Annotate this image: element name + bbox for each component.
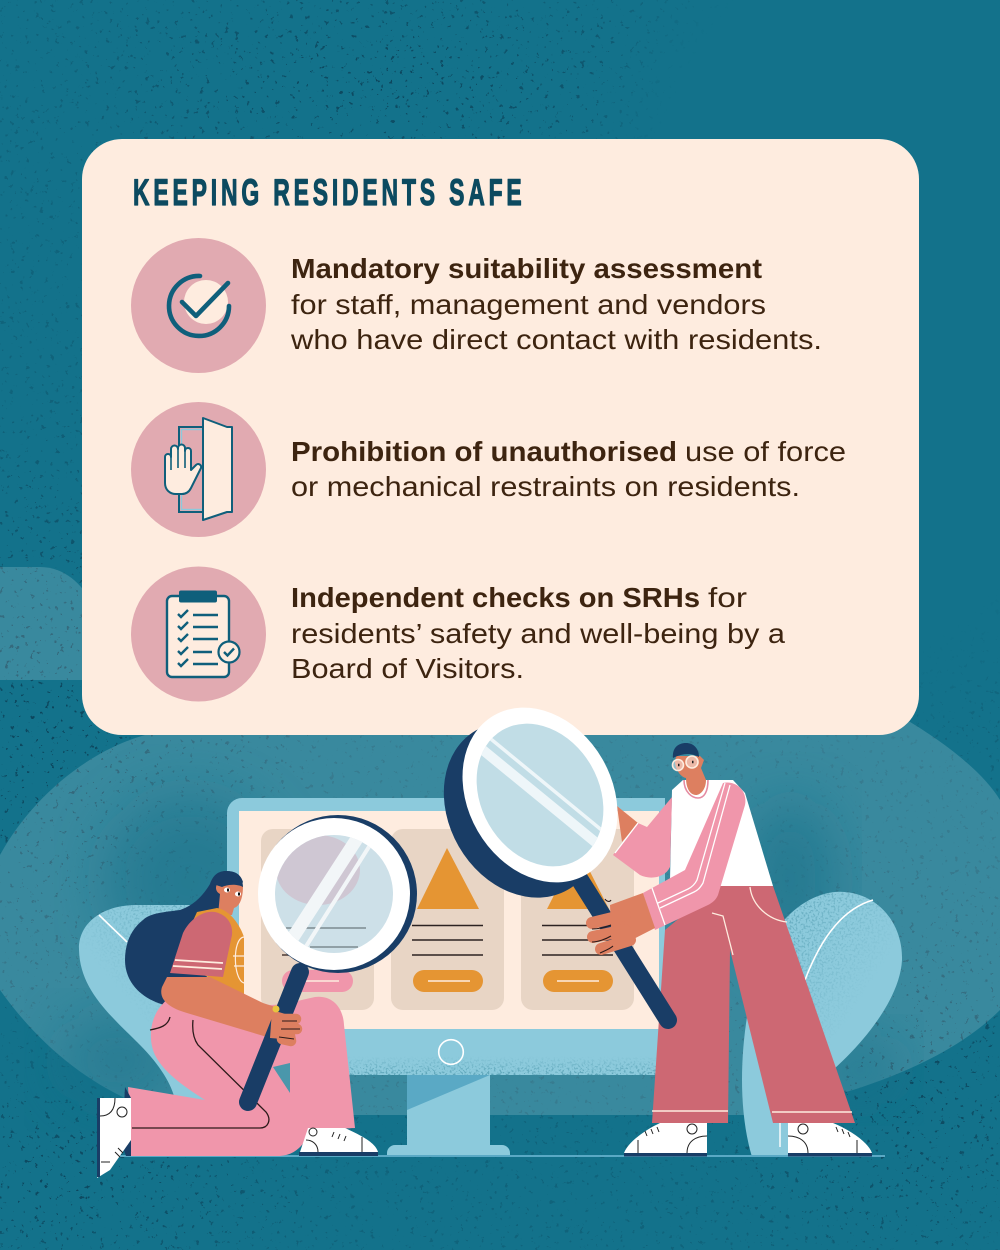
plant: right leaf and stem <box>742 890 905 1157</box>
woman <box>97 871 378 1178</box>
text: prohibition: use of force <box>685 436 846 467</box>
arm <box>161 977 290 1044</box>
face <box>216 884 243 915</box>
gap between legs <box>273 1063 290 1093</box>
text: independent checks <box>291 582 785 684</box>
vest <box>175 908 244 997</box>
right shoe <box>788 1123 872 1156</box>
title: KEEPING RESIDENTS SAFE <box>133 171 522 213</box>
floor line <box>100 1155 885 1157</box>
text: prohibition: Prohibition of unauthorised <box>291 436 677 467</box>
left shoe <box>624 1123 707 1156</box>
magnifier handle: woman <box>248 972 300 1102</box>
pants <box>652 886 855 1123</box>
decorative blob: left <box>0 567 90 680</box>
text: prohibition: or mechanical restraints on residents. <box>291 471 800 502</box>
hand: man <box>592 893 655 953</box>
text: prohibition <box>291 436 846 502</box>
right sleeve <box>643 782 745 930</box>
screen card: middle <box>391 829 504 1010</box>
pants <box>128 990 355 1156</box>
left sleeve <box>613 797 672 878</box>
icon: clipboard checklist <box>131 566 266 702</box>
magnifier: woman <box>258 815 417 973</box>
text: suitability assessment: who have direct contact with residents. <box>290 324 822 355</box>
hair fringe <box>213 871 243 887</box>
icon: hand and door <box>131 402 266 537</box>
text: independent checks: Independent checks on SRHs <box>291 582 700 613</box>
text: independent checks: residents’ safety and well-being by a <box>291 618 785 649</box>
hand: woman <box>270 1006 300 1041</box>
eyes <box>224 888 241 896</box>
text: suitability assessment <box>290 253 822 355</box>
text: independent checks: for <box>708 582 747 613</box>
sleeve <box>170 912 232 977</box>
back shoe <box>97 1087 131 1178</box>
text: suitability assessment: for staff, management and vendors <box>291 289 766 320</box>
hair <box>125 871 243 1005</box>
pants seams <box>132 1017 269 1128</box>
hair <box>673 743 699 758</box>
man <box>613 743 872 1156</box>
text: independent checks: Board of Visitors. <box>291 653 524 684</box>
icon: check mark <box>131 238 266 373</box>
screen card: right <box>521 829 634 1010</box>
collar <box>684 780 708 798</box>
card panel <box>82 139 919 735</box>
text: suitability assessment: Mandatory suitability assessment <box>291 253 762 284</box>
decorative blob: large behind illustration <box>0 716 1000 1115</box>
front shoe <box>299 1128 378 1156</box>
glasses <box>672 756 698 770</box>
plant: left leaf <box>78 905 208 1100</box>
screen card: left <box>261 829 374 1010</box>
neck and face <box>675 756 706 795</box>
left hand behind lens <box>617 806 638 842</box>
monitor <box>227 798 665 1155</box>
shirt <box>670 780 773 886</box>
magnifier: man <box>444 708 677 1029</box>
